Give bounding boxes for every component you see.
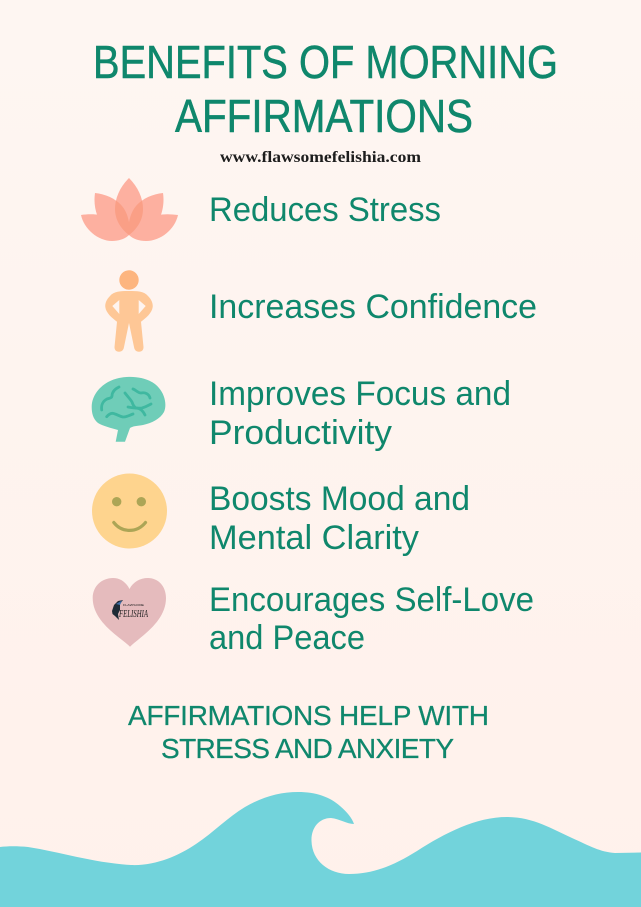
title: AFFIRMATIONS — [175, 90, 473, 142]
benefit: improves focus: Productivity — [209, 414, 393, 452]
icon: smiley face — [92, 474, 167, 548]
icon: heart with logo — [93, 578, 166, 647]
benefit: reduces stress: Reduces Stress — [209, 191, 441, 229]
icon: brain — [92, 377, 165, 442]
logo mark: FLAWSOME — [123, 603, 144, 607]
closing statement: AFFIRMATIONS HELP WITH — [128, 700, 489, 731]
benefit: self-love: Encourages Self-Love — [209, 581, 534, 619]
benefit: boosts mood — [209, 480, 470, 557]
benefit list — [209, 191, 537, 657]
title: BENEFITS OF MORNING — [93, 36, 558, 88]
logo mark — [112, 600, 149, 620]
benefit: self-love — [209, 581, 534, 657]
benefit: increases confidence: Increases Confidence — [209, 288, 537, 326]
wave — [0, 792, 641, 907]
closing statement — [128, 700, 489, 764]
title — [93, 36, 558, 142]
website url: www.flawsomefelishia.com — [220, 149, 421, 166]
icon: confident person — [105, 270, 153, 352]
benefit: self-love: and Peace — [209, 619, 365, 657]
icon: lotus — [81, 178, 178, 241]
logo mark: FELISHIA — [118, 609, 149, 620]
benefit: boosts mood: Boosts Mood and — [209, 480, 470, 518]
benefit: boosts mood: Mental Clarity — [209, 519, 420, 557]
closing statement: STRESS AND ANXIETY — [161, 733, 454, 764]
benefit: improves focus — [209, 375, 511, 452]
benefit: improves focus: Improves Focus and — [209, 375, 511, 413]
